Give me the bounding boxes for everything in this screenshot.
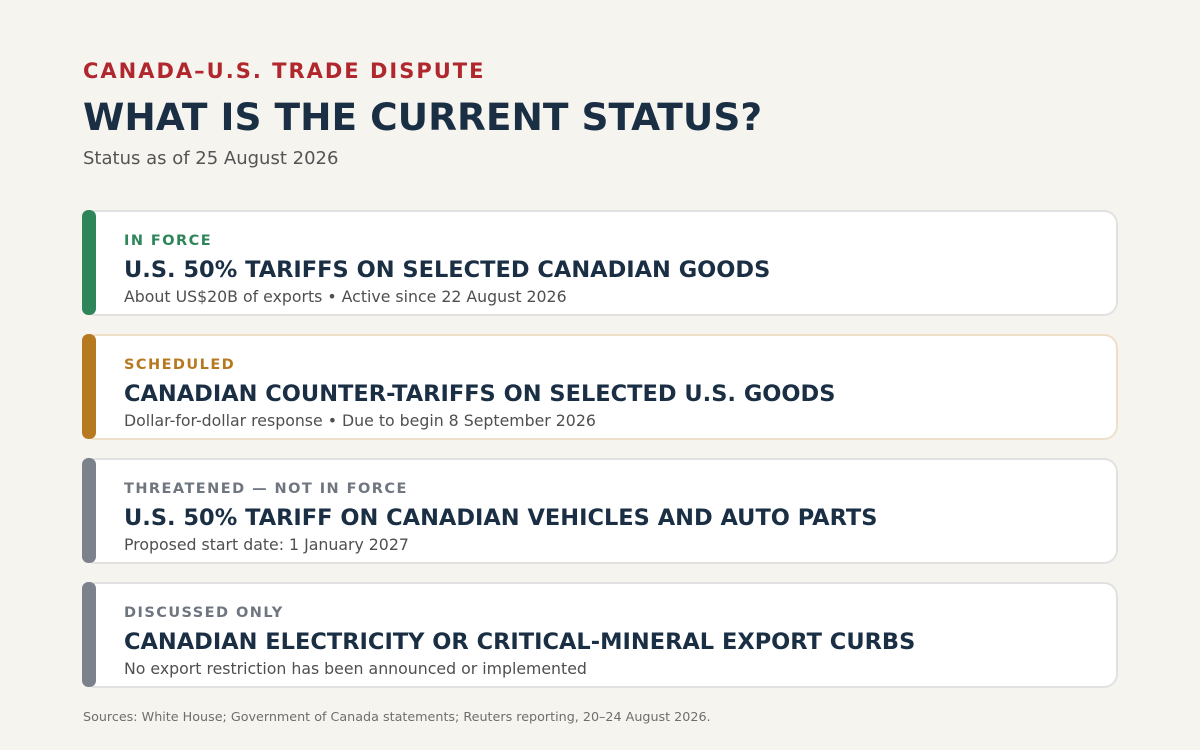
status label: threatened: THREATENED — NOT IN FORCE xyxy=(124,481,408,497)
heading: U.S. tariffs: U.S. 50% TARIFFS ON SELECTED CANADIAN GOODS xyxy=(124,257,770,283)
panel: discussed only xyxy=(82,582,1118,688)
detail text: About US$20B of exports • Active since 22 August 2026 xyxy=(124,287,567,306)
title: WHAT IS THE CURRENT STATUS? xyxy=(83,95,762,139)
eyebrow: CANADA–U.S. TRADE DISPUTE xyxy=(83,59,485,83)
status label: discussed only: DISCUSSED ONLY xyxy=(124,605,284,621)
status label: scheduled: SCHEDULED xyxy=(124,357,235,373)
panel: in force xyxy=(82,210,1118,316)
heading: vehicles tariff: U.S. 50% TARIFF ON CANADIAN VEHICLES AND AUTO PARTS xyxy=(124,505,877,531)
detail text: No export restriction has been announced or implemented xyxy=(124,659,587,678)
detail text: Proposed start date: 1 January 2027 xyxy=(124,535,409,554)
heading: Canadian counter-tariffs: CANADIAN COUNTER-TARIFFS ON SELECTED U.S. GOODS xyxy=(124,381,835,407)
sources footnote: Sources: White House; Government of Canada statements; Reuters reporting, 20–24 August 2026. xyxy=(83,710,711,725)
subtitle: Status as of 25 August 2026 xyxy=(83,148,338,169)
panel: threatened xyxy=(82,458,1118,564)
status label: in force: IN FORCE xyxy=(124,233,212,249)
status bar: grey xyxy=(82,582,96,687)
status bar: green xyxy=(82,210,96,315)
heading: export curbs: CANADIAN ELECTRICITY OR CRITICAL-MINERAL EXPORT CURBS xyxy=(124,629,915,655)
status bar: amber xyxy=(82,334,96,439)
status bar: grey xyxy=(82,458,96,563)
detail text: Dollar-for-dollar response • Due to begin 8 September 2026 xyxy=(124,411,596,430)
panel: scheduled xyxy=(82,334,1118,440)
